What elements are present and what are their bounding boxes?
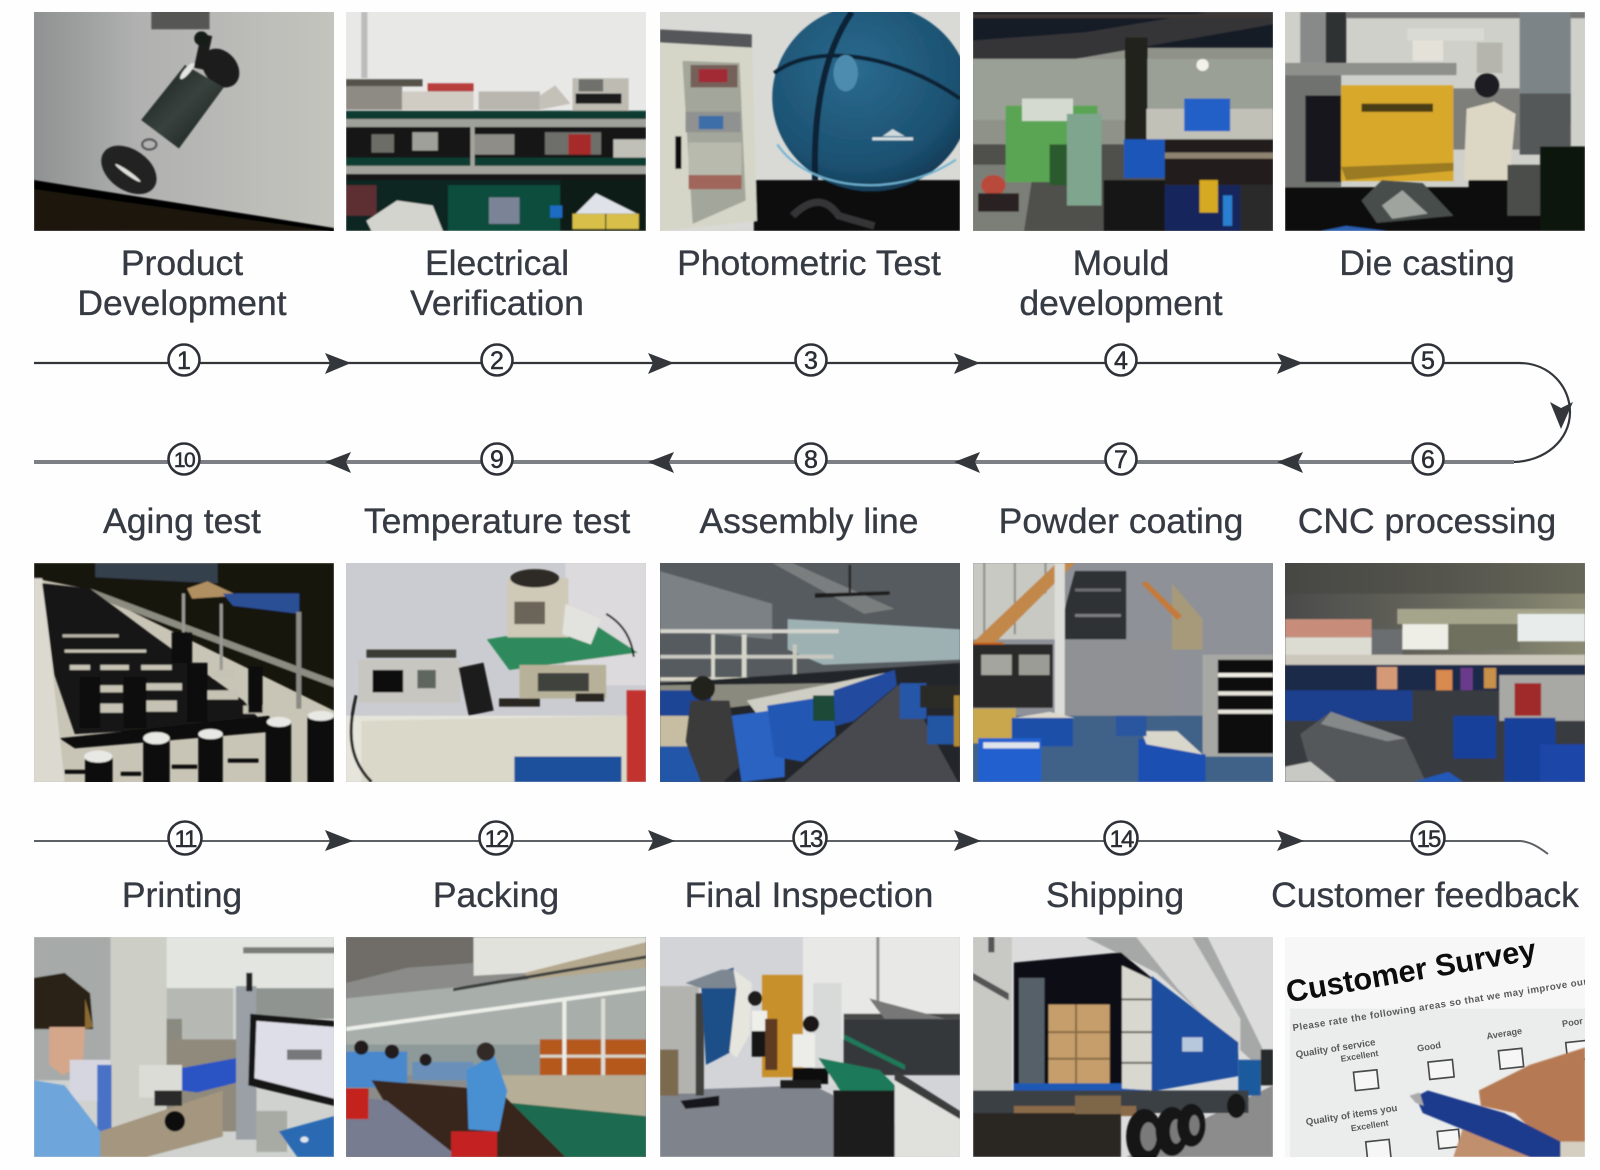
labels row 2: Assembly line — [700, 501, 918, 541]
labels row 1: Mould — [1073, 243, 1169, 283]
photo: die casting — [1285, 12, 1585, 231]
step numbers row 2: 10 — [174, 449, 195, 472]
labels row 3: Shipping — [1046, 875, 1184, 915]
row 1 connector with curved turn — [34, 353, 1573, 462]
step numbers row 1: 2 — [490, 347, 504, 375]
step numbers row 1: 5 — [1421, 347, 1435, 375]
photo: electrical verification — [346, 12, 646, 231]
photo: temperature test — [346, 563, 646, 782]
photo: customer survey: Quality of service — [1295, 1037, 1377, 1061]
labels row 1: Product — [121, 243, 243, 283]
photo: customer survey: Please rate the following areas so that we may improve our — [1292, 976, 1588, 1034]
step numbers row 2: 8 — [804, 446, 818, 474]
labels row 2 — [103, 501, 1556, 541]
photo: aging test — [34, 563, 334, 782]
photo: shipping — [973, 937, 1273, 1157]
labels row 3: Packing — [433, 875, 559, 915]
photo: customer survey — [1283, 933, 1588, 1157]
labels row 1: Die casting — [1339, 243, 1515, 283]
step numbers row 3: 11 — [175, 826, 197, 853]
step numbers row 2 — [168, 444, 1444, 474]
photo: customer survey: Poor — [1561, 1016, 1584, 1029]
labels row 1: development — [1019, 283, 1223, 323]
photo: customer survey: Quality of items you — [1305, 1103, 1398, 1128]
step numbers row 1: 4 — [1114, 347, 1128, 375]
labels row 1: Development — [77, 283, 287, 323]
labels row 3 — [122, 875, 1579, 915]
photo: final inspection — [660, 937, 960, 1157]
photo: customer survey: Excellent — [1340, 1048, 1379, 1064]
photo: photometric test — [660, 12, 960, 231]
row 3 connector — [34, 830, 1548, 854]
labels row 1: Electrical — [425, 243, 569, 283]
step numbers row 3: 15 — [1417, 826, 1441, 853]
step numbers row 1 — [168, 344, 1444, 376]
photo: packing — [346, 937, 646, 1157]
photo: powder coating — [973, 563, 1273, 782]
step numbers row 3: 14 — [1110, 826, 1134, 853]
step numbers row 3 — [168, 822, 1444, 854]
photo: customer survey: Average — [1486, 1026, 1523, 1041]
labels row 2: Temperature test — [364, 501, 630, 541]
step numbers row 2: 9 — [490, 446, 504, 474]
step numbers row 1: 3 — [804, 347, 818, 375]
labels row 1: Verification — [410, 283, 584, 323]
labels row 3: Final Inspection — [685, 875, 933, 915]
labels row 2: Aging test — [103, 501, 261, 541]
labels row 3: Printing — [122, 875, 242, 915]
survey title: Customer Survey — [1283, 933, 1539, 1009]
labels row 1 — [77, 243, 1515, 323]
row 2 connector — [34, 452, 1514, 473]
photo: product development — [34, 12, 334, 231]
photo: assembly line — [660, 563, 960, 782]
labels row 1: Photometric Test — [677, 243, 941, 283]
photo: printing — [34, 937, 334, 1157]
photo: customer survey: Excellent — [1350, 1118, 1389, 1133]
step numbers row 2: 6 — [1421, 446, 1435, 474]
photo: customer survey: Good — [1416, 1040, 1442, 1054]
labels row 3: Customer feedback — [1271, 875, 1579, 915]
step numbers row 2: 7 — [1114, 446, 1128, 474]
step numbers row 1: 1 — [177, 347, 191, 375]
step numbers row 3: 12 — [485, 826, 509, 853]
step numbers row 3: 13 — [799, 826, 823, 853]
labels row 2: Powder coating — [999, 501, 1243, 541]
photo: mould development — [973, 12, 1273, 231]
labels row 2: CNC processing — [1298, 501, 1556, 541]
photo: CNC processing — [1285, 563, 1585, 782]
